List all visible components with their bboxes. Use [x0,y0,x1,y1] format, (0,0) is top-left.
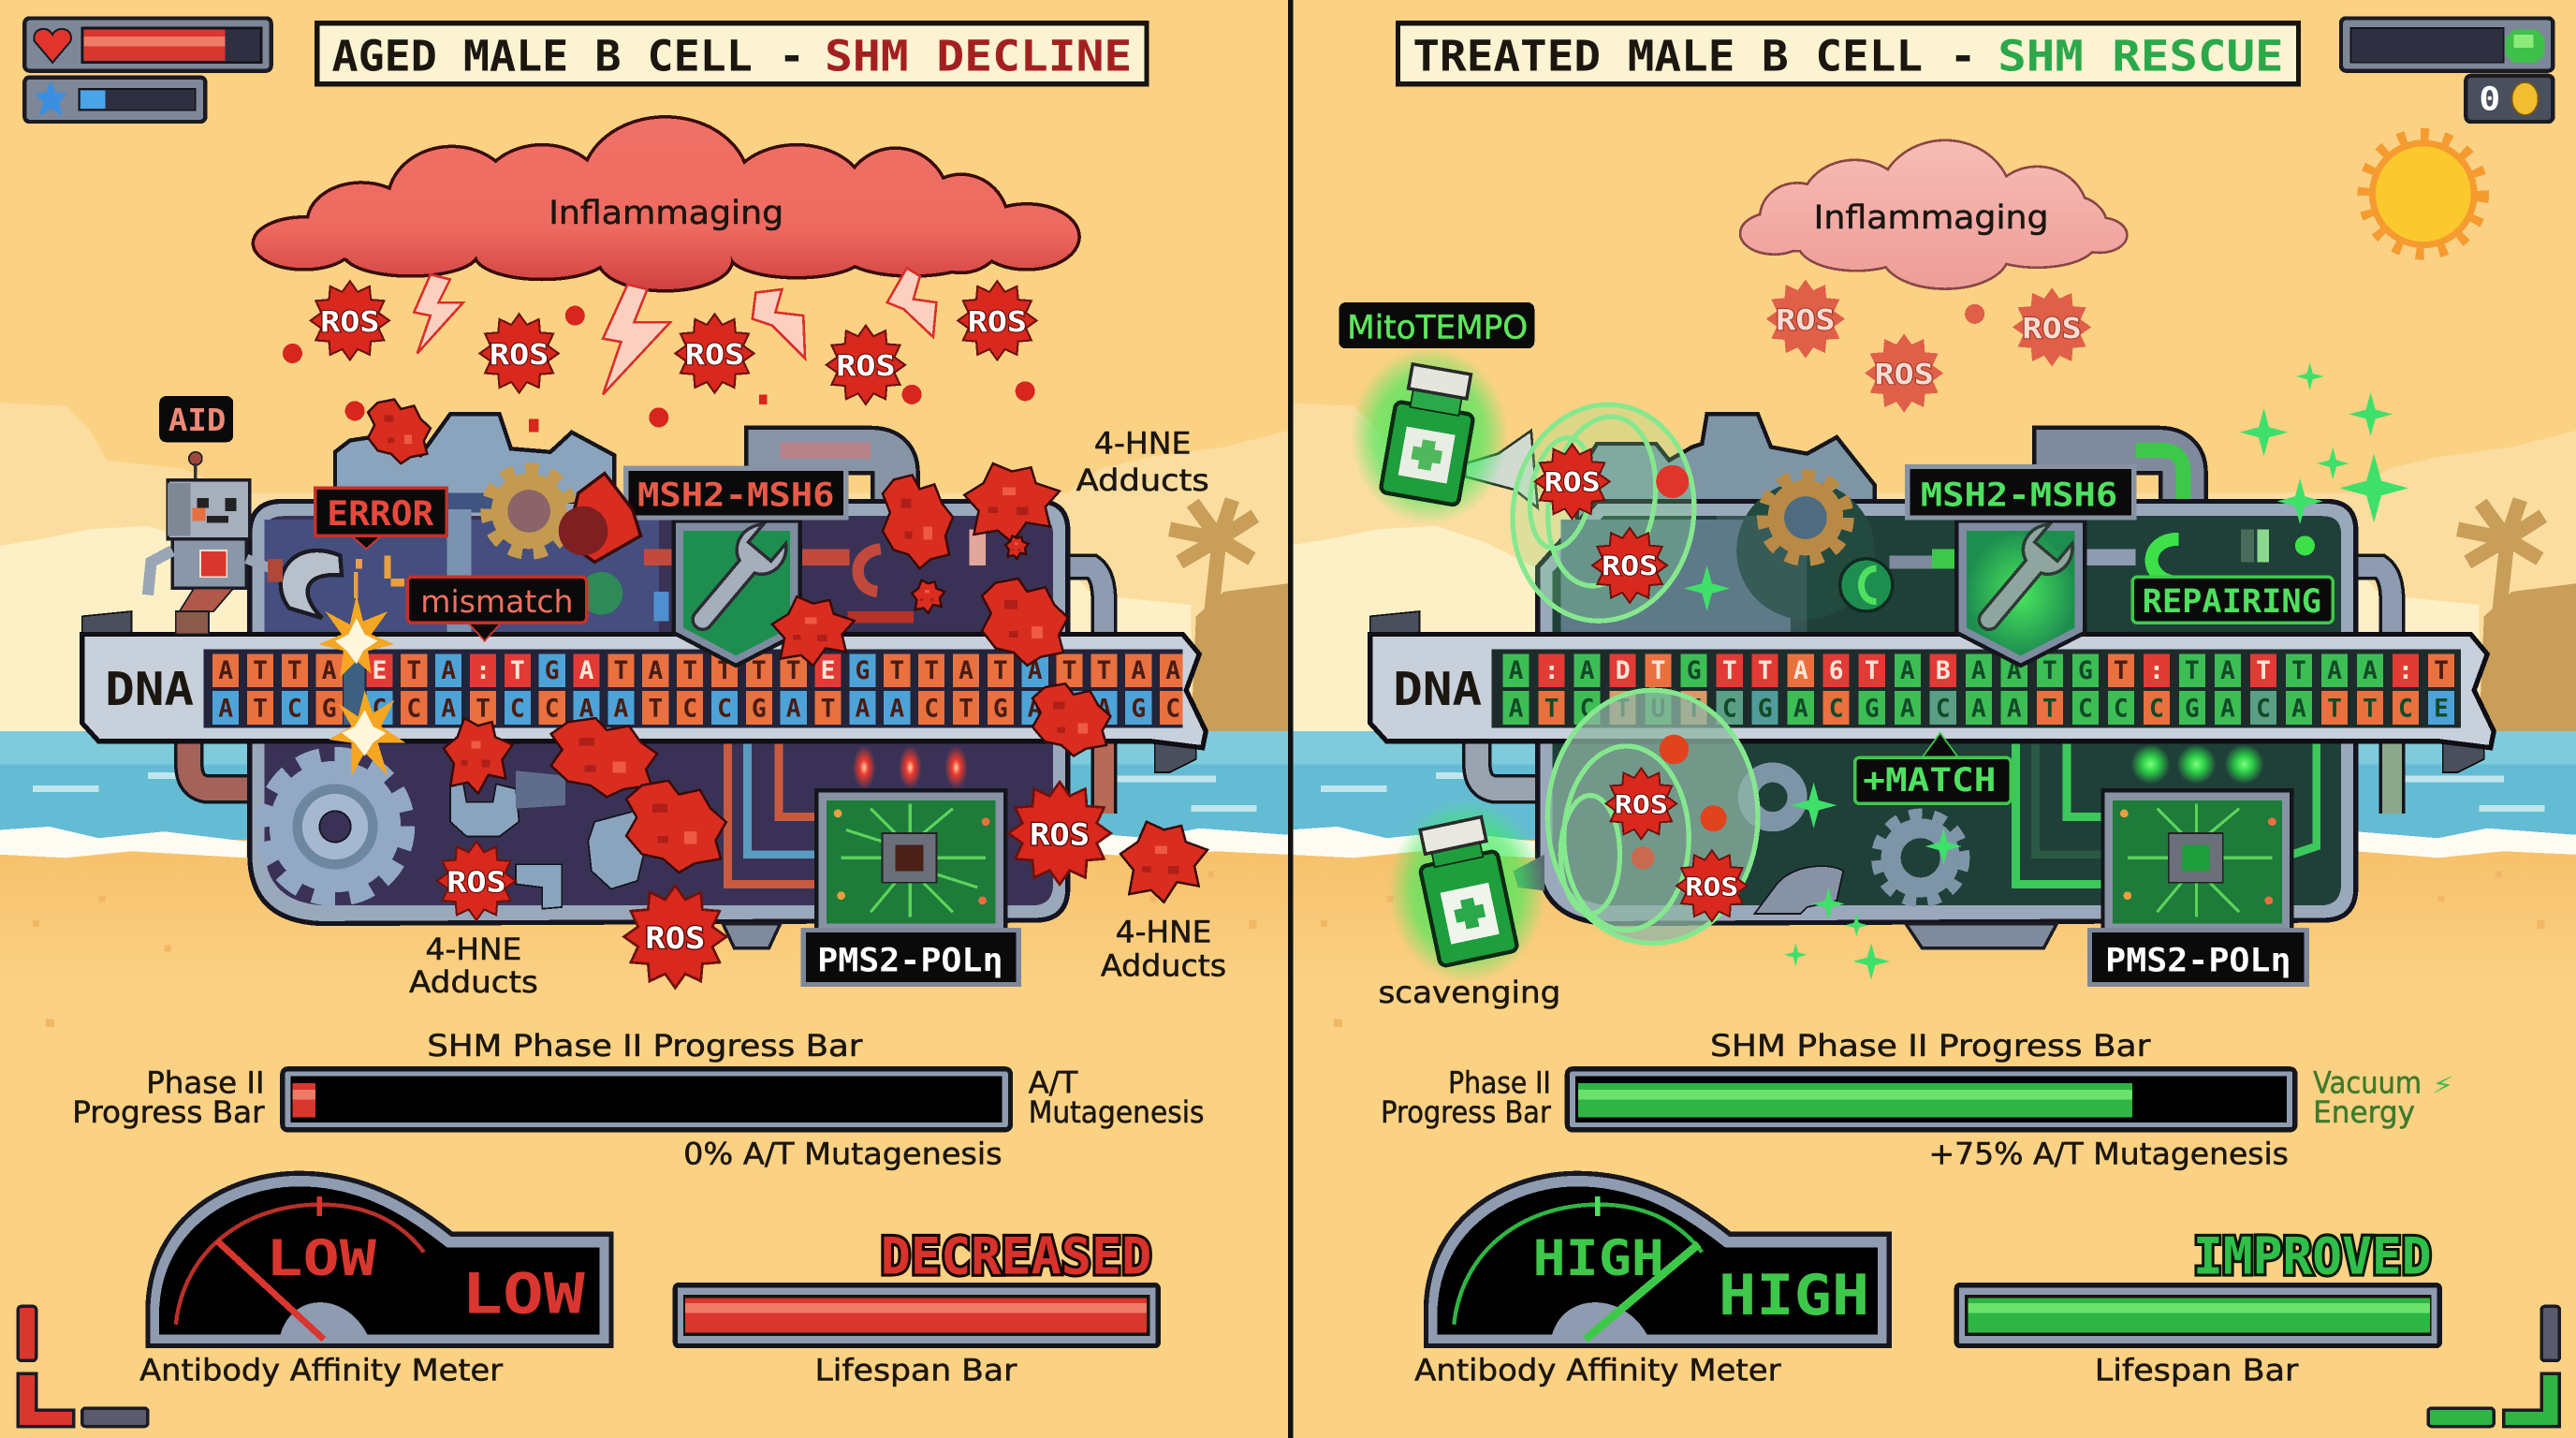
bronze gear [1763,475,1848,561]
green wrench head and indicators right [2086,529,2315,581]
background: right beach scene [1288,0,2576,1438]
4-HNE adducts caption bottom left [409,933,538,1000]
A/T mutagenesis label: Mutagenesis [1029,1096,1204,1130]
scavenging cone top [1466,431,1538,507]
sparks at DNA break [318,555,406,776]
ROS particles in the air: ROS [320,306,379,339]
antibody affinity gauge: low: LOW [266,1230,376,1287]
REPAIRING label: REPAIRING [2143,582,2321,621]
ROS being scavenged bottom [1605,735,1748,921]
PMS2-POL eta chip [2103,790,2291,932]
DNA strip: DNA [105,662,194,716]
ROS particles on machine: ROS [645,920,705,956]
+MATCH label: +MATCH [1863,761,1996,800]
ROS being scavenged bottom: ROS [1615,791,1668,820]
inflammaging cloud: Inflammaging [549,194,783,232]
machine body [1538,481,2356,924]
ROS particles in the air: ROS [685,339,744,372]
mismatch label [407,577,587,641]
0 percent A/T readout: 0% A/T Mutagenesis [683,1138,1003,1172]
machine base tray [1906,924,2056,948]
machine base tray [723,924,781,948]
AID label: AID [168,402,226,438]
faded ROS particles: ROS [1875,359,1934,391]
lower left pipe [189,742,255,789]
antibody affinity gauge: low: LOW [461,1262,585,1327]
ROS being scavenged top [1535,444,1689,603]
top pipe with green flow [2056,450,2184,509]
antibody affinity gauge: high: HIGH [1533,1230,1664,1287]
MitoTEMPO label: MitoTEMPO [1347,309,1528,347]
PMS2-POL eta label [803,931,1018,984]
ROS particles in the air [283,281,1036,433]
progress bar: 0 percent [283,1069,1010,1130]
improved label: IMPROVED [2193,1226,2432,1285]
lower right pipe [2384,742,2399,814]
scavenging cone bottom [1513,855,1544,890]
phase II label: Phase II [146,1066,265,1100]
scavenging rings bottom [1547,690,1758,944]
panel: treated male B cell [1339,18,2559,1427]
broken gear silhouette behind machine [335,414,614,509]
scavenging caption: scavenging [1379,976,1560,1010]
side pipe right top [2356,567,2392,635]
antibody affinity gauge: high [1426,1173,1889,1346]
4-HNE adducts caption top right [1076,428,1209,498]
panel: aged male B cell [18,18,1226,1427]
ROS being scavenged bottom: ROS [1685,873,1738,902]
broken gear silhouette behind machine [1577,414,1875,526]
4-HNE adducts caption top right: Adducts [1076,464,1209,498]
vacuum energy label: ⚡ [2432,1071,2454,1098]
DNA strip [1370,611,2494,772]
DNA strip: DNA [1393,662,1482,716]
DNA top strand bases repaired: A : A DT G TTA6T A B AATG T : TA T TAA : T [1509,657,2449,685]
ROS particles on machine [437,782,1111,988]
faded ROS particles: ROS [1776,304,1835,337]
phase II label: Progress Bar [72,1096,265,1130]
faded ROS particles: ROS [2023,313,2082,345]
antibody affinity caption: Antibody Affinity Meter [1414,1354,1781,1387]
progress bar: 75 percent [1567,1069,2295,1130]
title: aged male B cell: SHM DECLINE [825,32,1132,81]
antibody affinity gauge: high: HIGH [1719,1264,1869,1328]
pipes and connectors around shield [580,529,986,623]
AID robot [148,452,283,635]
lifespan caption: Lifespan Bar [2095,1354,2298,1387]
SHM progress heading: SHM Phase II Progress Bar [1710,1030,2150,1064]
corner bracket bottom left [18,1306,148,1427]
background: left beach scene [0,0,1288,1438]
antibody affinity gauge: low [148,1173,611,1346]
HUD: health bar with heart [24,18,271,71]
machine body [250,493,1068,924]
title: aged male B cell [317,23,1147,84]
corner bracket bottom right [2428,1306,2559,1427]
ROS being scavenged top: ROS [1544,467,1601,498]
4-HNE adducts caption bottom right [1101,917,1226,984]
HUD: empty bar with green gem [2341,18,2553,71]
MSH2-MSH6 label [626,468,846,518]
sun [2364,135,2482,253]
HUD: energy bar with star [24,78,205,122]
vacuum energy label [2313,1066,2454,1130]
green sparkles [1684,362,2408,980]
DNA top strand bases: ATTA E TA :T G A TATTTT E GTTATATTAA [218,657,1180,685]
MitoTEMPO bottle bottom [1388,799,1546,983]
AID label [159,396,233,442]
MitoTEMPO bottle top [1351,346,1508,524]
title: treated male B cell: TREATED MALE B CELL - [1412,32,1976,81]
panel divider [1288,0,1293,1438]
ROS being scavenged top: ROS [1602,551,1658,582]
lightning bolts [414,268,936,394]
4-HNE adducts caption bottom left: Adducts [409,966,538,1000]
ROS particles in the air: ROS [490,339,549,372]
decreased label: DECREASED [881,1226,1151,1285]
side pipe right top [1068,567,1104,635]
PMS2-POL eta label: PMS2-POLη [817,941,1003,979]
ROS particles in the air: ROS [836,350,896,383]
4-HNE adducts caption bottom left: 4-HNE [426,933,521,967]
green circuit traces [2016,742,2317,884]
PMS2-POL eta label: PMS2-POLη [2105,941,2291,979]
ROS particles on machine: ROS [1030,817,1090,853]
PMS2-POL eta label [2089,931,2306,984]
ROS particles in the air: ROS [968,306,1027,339]
vacuum energy label: Energy [2313,1096,2415,1130]
small inflammaging cloud: Inflammaging [1814,198,2049,237]
MSH2-MSH6 label: MSH2-MSH6 [1921,477,2117,515]
4-HNE adducts caption top right: 4-HNE [1094,428,1191,462]
inflammaging cloud [255,119,1077,289]
chip LEDs green [2130,744,2264,784]
4-HNE adducts caption bottom right: Adducts [1101,950,1226,984]
phase II label [1381,1066,1551,1130]
faded ROS particles [1766,280,2091,413]
MSH2-MSH6 shield with glowing wrench [1956,519,2085,666]
4-HNE adducts caption bottom right: 4-HNE [1116,917,1211,950]
title: treated male B cell: SHM RESCUE [1998,32,2284,81]
top pipe [768,450,896,509]
phase II label [72,1066,265,1130]
small inflammaging cloud [1741,141,2126,287]
ROS particles on machine: ROS [446,866,506,899]
antibody affinity caption: Antibody Affinity Meter [139,1354,503,1387]
DNA bottom strand bases: ATCGCCATCCAATCCGATAACTGAAAGC [218,695,1180,723]
lifespan bar: decreased [675,1285,1158,1346]
DNA strip [82,611,1206,772]
4-HNE adduct blobs [368,400,1208,902]
lifespan bar: improved [1956,1285,2439,1346]
vacuum energy label: Vacuum [2313,1066,2422,1100]
phase II label: Progress Bar [1381,1096,1551,1130]
SHM progress heading: SHM Phase II Progress Bar [427,1030,862,1064]
chip LEDs [853,746,968,789]
+MATCH label [1855,733,2011,803]
ERROR label: ERROR [327,493,434,534]
MSH2-MSH6 label: MSH2-MSH6 [637,477,835,515]
MSH2-MSH6 label [1908,467,2134,518]
lower right pipe [1096,742,1111,814]
lower left pipe [1477,742,1543,789]
scavenging rings top [1499,393,1708,633]
MSH2-MSH6 shield with wrench [674,519,800,666]
title: aged male B cell: AGED MALE B CELL - [332,32,805,81]
DNA bottom strand bases repaired: ATCTUTCGACGACAATCCCGACATTCE [1509,695,2449,723]
circuit traces [728,742,818,884]
phase II label: Phase II [1448,1066,1551,1100]
+75 percent A/T readout: +75% A/T Mutagenesis [1928,1138,2289,1172]
A/T mutagenesis label: A/T [1029,1066,1078,1100]
mismatch label: mismatch [420,583,574,620]
big grey gear [263,755,407,899]
bronze gear [487,468,572,554]
HUD: coin counter: 0 [2479,81,2500,119]
lifespan caption: Lifespan Bar [815,1354,1017,1387]
title: treated male B cell [1398,23,2298,84]
grey gears lower [1748,772,1965,914]
broken small gears [450,770,646,909]
ERROR label [315,488,446,549]
crescent wrench [281,550,342,618]
A/T mutagenesis label [1029,1066,1204,1130]
HUD: coin counter [2466,76,2553,122]
green wrench head left [1840,549,1956,611]
PMS2-POL eta chip [816,790,1005,932]
